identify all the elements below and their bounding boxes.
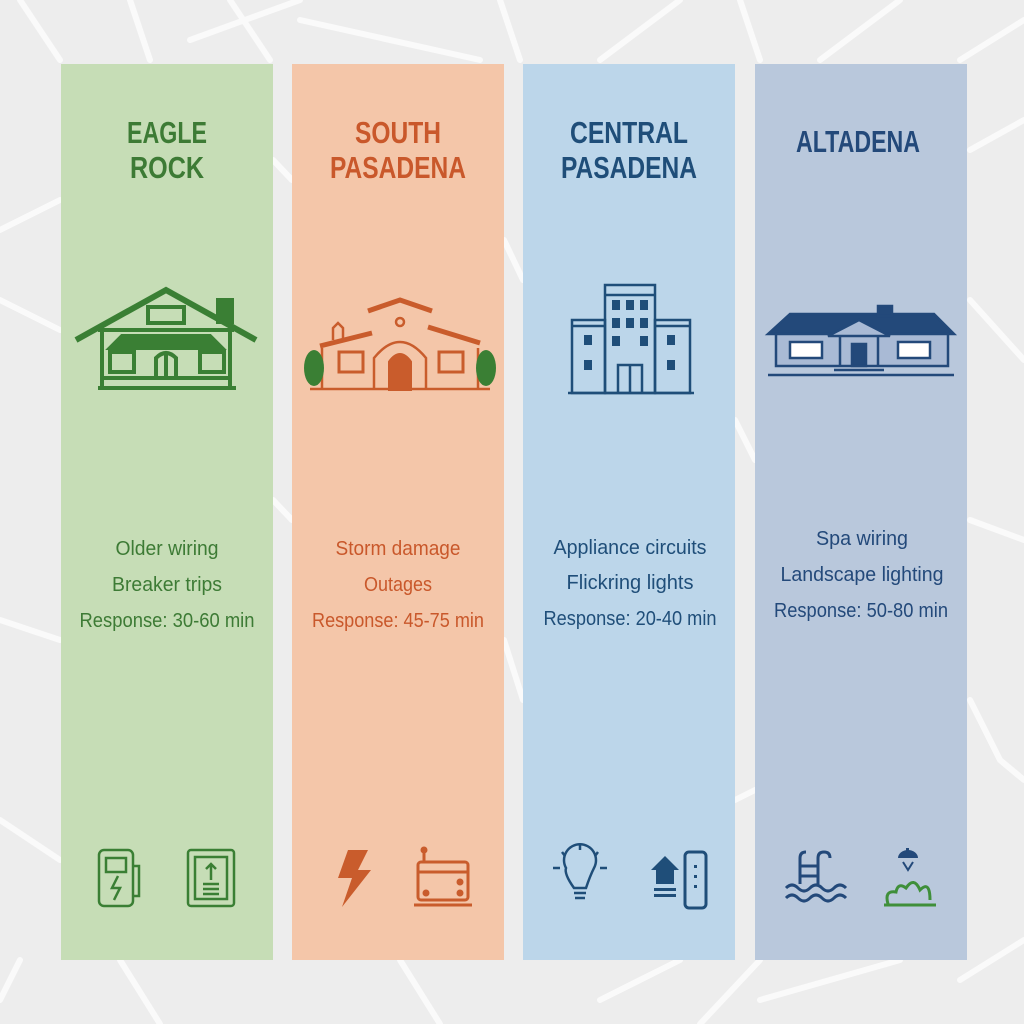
- text: South Pasadena issues: Outages: [364, 574, 432, 596]
- icon: landscape light: [884, 848, 936, 905]
- panel: Altadena: [755, 64, 967, 960]
- icon: light bulb: [553, 844, 607, 898]
- icon: pool ladder: [786, 852, 846, 901]
- icon: lightning bolt: [338, 850, 371, 907]
- text: Central Pasadena issues: [544, 537, 716, 630]
- text: Altadena issues: Response: 50-80 min: [774, 600, 948, 622]
- text: Altadena issues: Spa wiring: [816, 528, 908, 550]
- text: Central Pasadena issues: Response: 20-40 min: [544, 608, 716, 630]
- panel: Eagle Rock: [61, 64, 273, 960]
- text: Central Pasadena issues: Flickring lights: [566, 572, 694, 594]
- text: South Pasadena issues: Response: 45-75 min: [312, 610, 484, 632]
- text: Eagle Rock issues: Breaker trips: [112, 574, 222, 596]
- text: Altadena issues: [774, 528, 948, 622]
- heading: Eagle Rock: [127, 115, 207, 185]
- heading: Eagle Rock: EAGLE: [127, 115, 207, 150]
- heading: South Pasadena: PASADENA: [330, 150, 466, 185]
- heading: South Pasadena: [330, 115, 466, 185]
- icon: smart home controller: [651, 852, 706, 908]
- panel: South Pasadena: [292, 64, 504, 960]
- heading: Eagle Rock: ROCK: [130, 150, 204, 185]
- text: Eagle Rock issues: Response: 30-60 min: [80, 610, 254, 632]
- heading: Central Pasadena: CENTRAL: [570, 115, 688, 150]
- heading: Altadena: ALTADENA: [796, 124, 920, 159]
- text: South Pasadena issues: Storm damage: [336, 538, 460, 560]
- icon: electrical panel: [188, 850, 234, 906]
- icon: craftsman house: [76, 290, 256, 388]
- text: Eagle Rock issues: [80, 538, 254, 632]
- panel: Central Pasadena: [523, 64, 735, 960]
- text: Central Pasadena issues: Appliance circuits: [554, 537, 706, 559]
- heading: South Pasadena: SOUTH: [355, 115, 441, 150]
- icon: generator: [414, 848, 472, 905]
- icon: EV charger: [99, 850, 139, 906]
- heading: Central Pasadena: [561, 115, 697, 185]
- icon: apartment building: [568, 285, 694, 393]
- icon: ranch house: [768, 306, 954, 375]
- text: Altadena issues: Landscape lighting: [780, 564, 944, 586]
- text: Eagle Rock issues: Older wiring: [116, 538, 218, 560]
- icon: spanish house: [304, 300, 496, 389]
- heading: Central Pasadena: PASADENA: [561, 150, 697, 185]
- text: South Pasadena issues: [312, 538, 484, 632]
